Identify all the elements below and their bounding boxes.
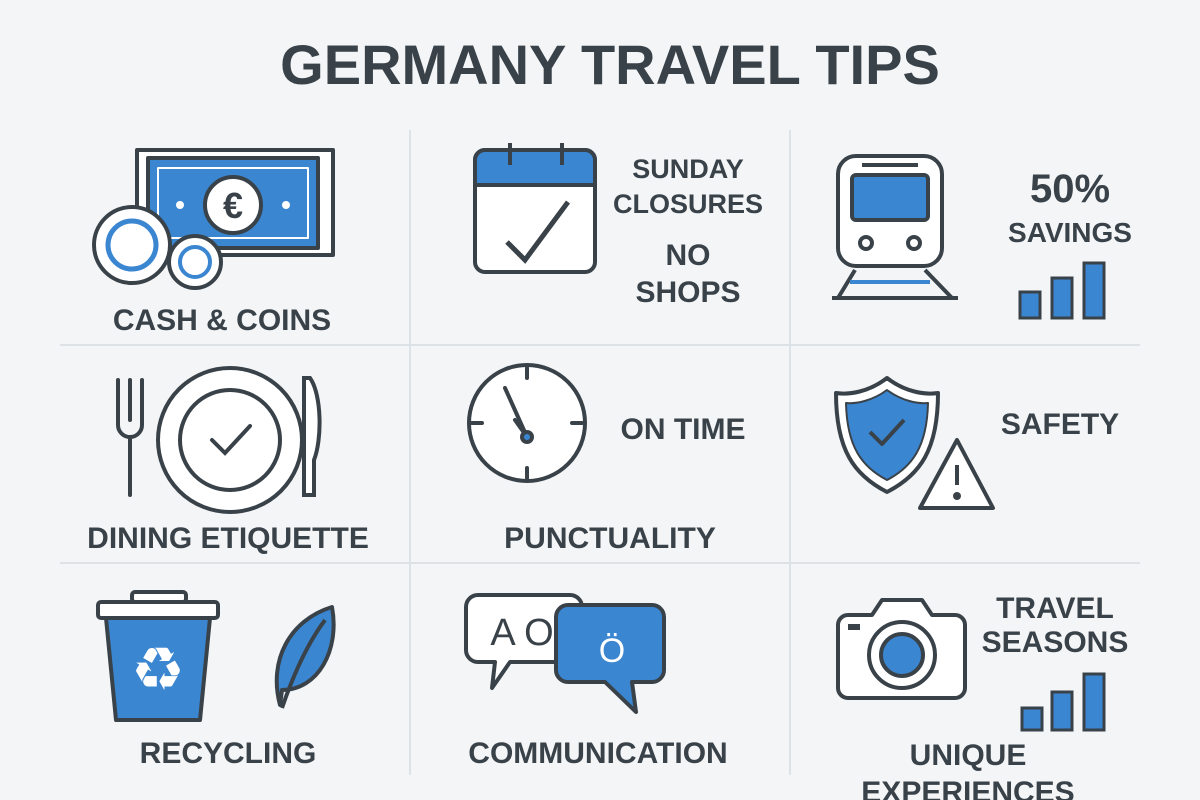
icon: banknote: € <box>223 185 243 226</box>
panel: cash and coins <box>94 150 333 288</box>
icon: dining <box>118 368 320 512</box>
chart: savings bars <box>1020 263 1104 318</box>
icon: speech bubbles: A O <box>490 612 554 654</box>
text: sunday closures <box>613 154 763 309</box>
text: sunday closures: CLOSURES <box>613 189 763 219</box>
label: dining etiquette: DINING ETIQUETTE <box>87 522 369 555</box>
text: unique experiences: UNIQUE <box>910 739 1026 772</box>
icon: recycling bin <box>98 592 218 720</box>
icon: train <box>832 156 958 298</box>
icon: clock <box>469 365 585 481</box>
text: sunday closures: SUNDAY <box>632 154 744 184</box>
text: unique experiences <box>861 739 1075 800</box>
icon: shield and warning <box>836 378 993 508</box>
text: 50% savings <box>1008 167 1132 248</box>
icon: banknote <box>137 150 333 255</box>
icon: speech bubbles <box>466 595 664 712</box>
text: sunday closures: SHOPS <box>635 276 741 309</box>
text: travel seasons: TRAVEL <box>996 592 1114 625</box>
icon: recycling bin: ♻ <box>131 635 185 705</box>
text: 50% savings: 50% <box>1030 167 1110 211</box>
label: communication: COMMUNICATION <box>468 737 728 770</box>
text: travel seasons: SEASONS <box>982 626 1128 659</box>
icon: coins <box>94 207 221 288</box>
label: cash & coins: CASH & COINS <box>113 304 331 337</box>
title: GERMANY TRAVEL TIPS <box>280 33 940 96</box>
text: safety: SAFETY <box>1001 408 1119 441</box>
text: 50% savings: SAVINGS <box>1008 217 1132 248</box>
label: recycling: RECYCLING <box>140 737 316 770</box>
icon: leaf <box>277 607 334 708</box>
icon: camera <box>838 600 965 698</box>
chart: seasons bars <box>1022 674 1104 730</box>
icon: calendar <box>475 143 595 272</box>
text: sunday closures: NO <box>666 239 710 272</box>
icon: speech bubbles: Ö <box>599 632 625 670</box>
text: travel seasons <box>982 592 1128 659</box>
text: on time: ON TIME <box>620 413 746 446</box>
label: punctuality: PUNCTUALITY <box>504 522 716 555</box>
